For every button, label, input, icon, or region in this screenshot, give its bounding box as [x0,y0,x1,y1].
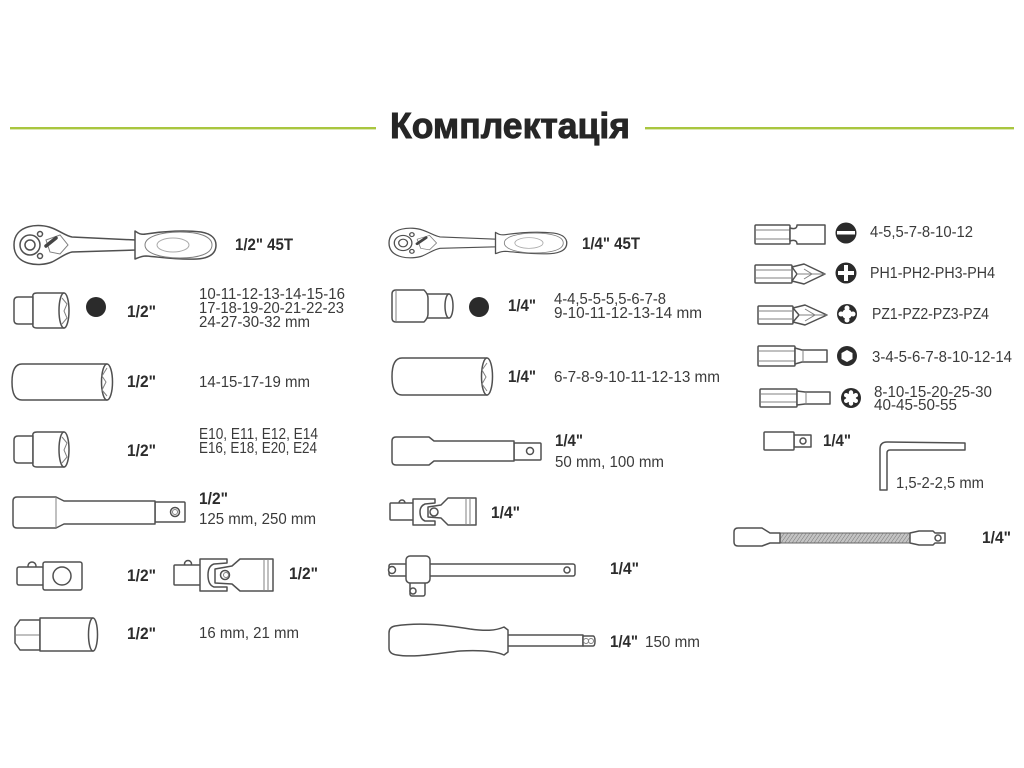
sizes [554,291,702,322]
panel: 1/4 inch tools [388,228,720,656]
sizes: 17-18-19-20-21-22-23 [199,300,344,317]
extension label [555,432,664,471]
icon: flexible shaft [734,528,945,546]
icon: E socket [14,432,69,467]
icon: screwdriver [389,624,595,656]
label: 1/4" [610,560,639,578]
sizes: 40-45-50-55 [874,397,957,414]
sizes: E16, E18, E20, E24 [199,440,317,457]
icon: extension bar [392,437,541,465]
label: 1/2" [289,565,318,583]
sizes [199,286,345,331]
label: 1/4" [491,504,520,522]
icon: 12-point profile [86,297,106,317]
icon: socket [392,290,453,322]
panel: 1/2 inch tools [12,225,345,651]
sizes: 24-27-30-32 mm [199,314,310,331]
extension label: 50 mm, 100 mm [555,454,664,471]
title rule right [645,127,1014,129]
extension label: 1/2" [199,490,228,508]
icon: adapter [17,562,82,590]
icon: Phillips symbol [836,262,856,284]
icon: deep socket [392,358,492,395]
label: 1/2" [127,303,156,321]
label: 1/4 45T: 1/4" 45T [582,235,640,253]
sizes: 3-4-5-6-7-8-10-12-14 [872,349,1012,366]
sizes: E10, E11, E12, E14 [199,426,318,443]
sizes: 10-11-12-13-14-15-16 [199,286,345,303]
extension label: 1/4" [555,432,583,450]
icon: Torx bit [760,389,830,407]
icon: universal joint [390,498,476,525]
icon: bit socket [15,618,98,651]
icon: T-bar [388,556,575,596]
extension label: 125 mm, 250 mm [199,511,316,528]
label: 1/4" [508,297,536,315]
icon: 12-point profile [469,297,489,317]
icon: deep socket [12,364,112,400]
sizes: 6-7-8-9-10-11-12-13 mm [554,369,720,386]
label: 1/2" [127,567,156,585]
icon: universal joint [174,559,273,591]
title rule left [10,127,376,129]
sizes: 16 mm, 21 mm [199,625,299,642]
label and length [610,633,700,651]
sizes: 4-5,5-7-8-10-12 [870,224,973,241]
icon: Phillips bit [755,264,825,284]
sizes: 14-15-17-19 mm [199,374,310,391]
icon: Pozidriv symbol [837,304,857,324]
label: 1/4" [982,529,1011,547]
label: 1/4" [823,432,851,450]
icon: Pozidriv bit [758,305,827,325]
hex key sizes: 1,5-2-2,5 mm [896,475,984,492]
label: 1/2" [127,625,156,643]
label: 1/4" [508,368,536,386]
icon: slotted bit [755,225,825,244]
label and length: 1/4" [610,633,638,651]
extension label [199,490,316,528]
icon: extension bar [13,497,185,528]
title: Комплектація [390,105,630,146]
sizes [199,426,318,457]
icon: socket [14,293,69,328]
icon: bit adapter [764,432,811,450]
icon: hex symbol [837,346,857,366]
icon: 1/4 ratchet [389,228,567,258]
sizes: PH1-PH2-PH3-PH4 [870,265,995,282]
label and length: 150 mm [645,634,700,651]
sizes: 4-4,5-5-5,5-6-7-8 [554,291,666,308]
icon: Torx symbol [841,388,861,408]
icon: hex key [880,442,965,490]
label: 1/2" [127,373,156,391]
sizes [874,384,992,414]
icon: 1/2 ratchet [14,225,216,265]
icon: slot symbol [836,222,856,244]
label: 1/2" [127,442,156,460]
sizes: 8-10-15-20-25-30 [874,384,992,401]
panel: bits and accessories [734,222,1012,547]
label: 1/2 45T: 1/2" 45T [235,236,293,254]
sizes: PZ1-PZ2-PZ3-PZ4 [872,306,989,323]
icon: hex bit [758,346,827,366]
sizes: 9-10-11-12-13-14 mm [554,305,702,322]
